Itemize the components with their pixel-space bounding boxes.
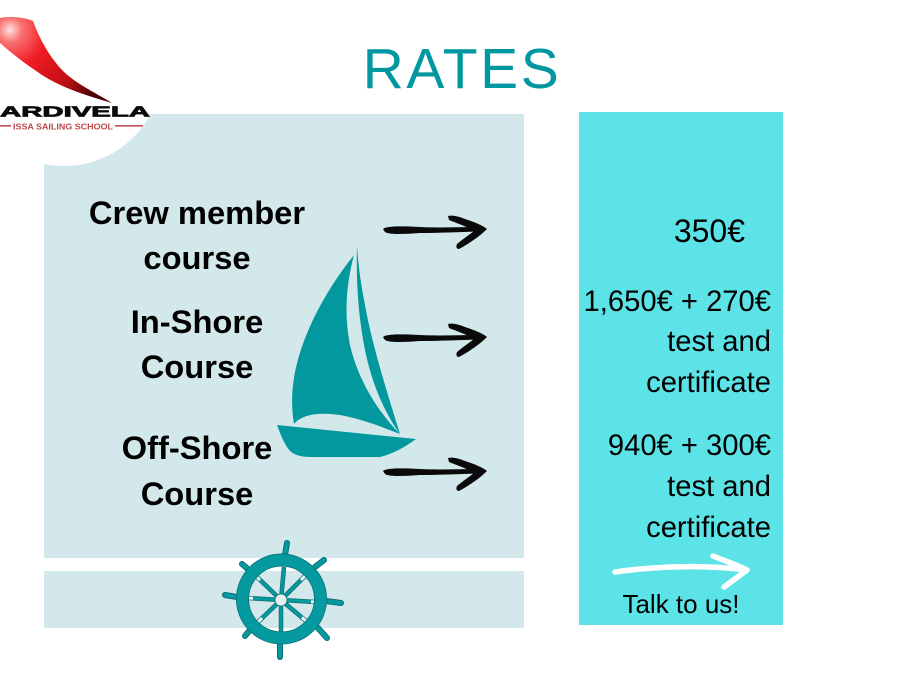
course names	[89, 194, 305, 512]
prices	[584, 213, 771, 544]
logo: ISSA SAILING SCHOOL	[13, 122, 113, 132]
in-shore note line 2: certificate	[646, 367, 771, 399]
panel: course list	[44, 114, 524, 558]
price: off-shore: 940€ + 300€	[608, 430, 771, 462]
logo: ARDIVELA	[0, 104, 151, 120]
off-shore note line 1: test and	[667, 471, 771, 503]
course: off-shore: Off-Shore	[122, 429, 272, 466]
arrow: talk to us	[615, 556, 747, 587]
price: in-shore: 1,650€ + 270€	[584, 286, 771, 318]
title: RATES	[363, 37, 561, 101]
call to action: Talk to us!	[622, 589, 740, 619]
arrow: in-shore	[383, 324, 487, 357]
icon: sailboat	[277, 245, 416, 457]
course: off-shore second line: Course	[141, 475, 253, 512]
panel: lower strip	[44, 571, 524, 628]
arrow: crew member	[383, 216, 487, 249]
price: crew member: 350€	[674, 213, 745, 249]
course: crew member: Crew member	[89, 194, 305, 231]
panel: prices	[579, 112, 783, 625]
course: crew member second line: course	[143, 239, 251, 276]
logo	[0, 0, 162, 166]
icon: ship wheel	[225, 543, 341, 657]
arrow: off-shore	[383, 458, 487, 491]
course: in-shore second line: Course	[141, 348, 253, 385]
in-shore note line 1: test and	[667, 326, 771, 358]
off-shore note line 2: certificate	[646, 512, 771, 544]
course: in-shore: In-Shore	[131, 303, 263, 340]
